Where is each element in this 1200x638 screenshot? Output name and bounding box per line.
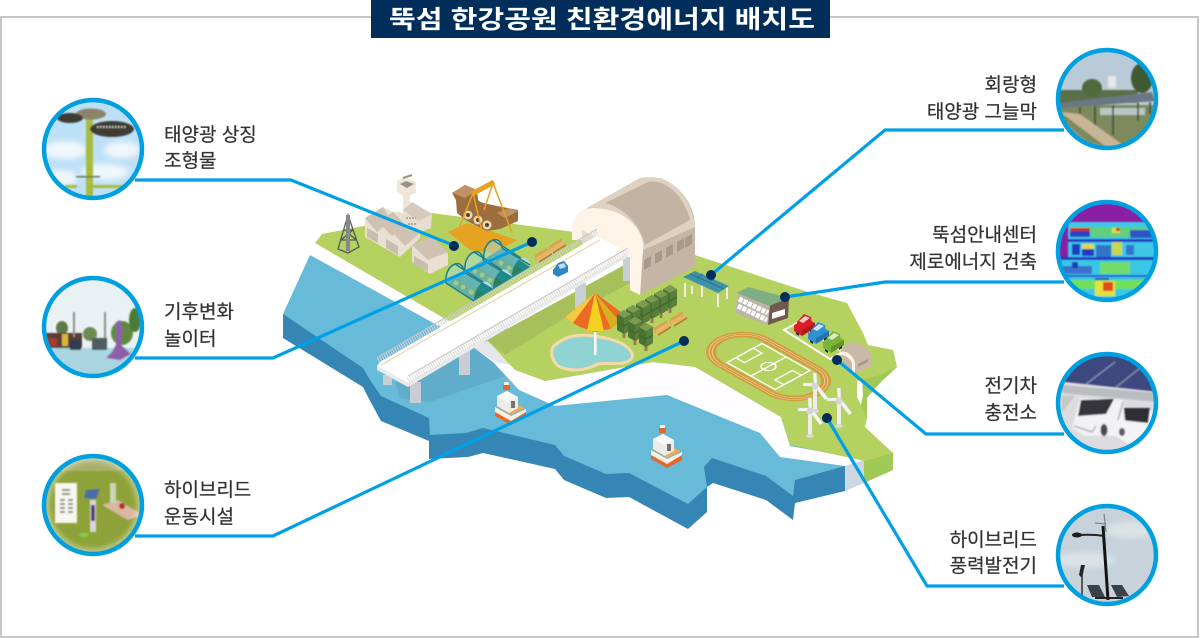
south bank white shore bbox=[473, 340, 866, 466]
leader line: charging station bbox=[837, 360, 1064, 434]
pylon bbox=[338, 215, 359, 253]
running track and field bbox=[691, 323, 846, 410]
photo: playground bbox=[40, 275, 146, 379]
label: EV charging station: 전기차 bbox=[985, 375, 1037, 397]
title: 뚝섬 한강공원 친환경에너지 배치도 bbox=[389, 6, 815, 34]
label: corridor solar canopy: 태양광 그늘막 bbox=[927, 101, 1037, 123]
photo: corridor solar canopy bbox=[1055, 48, 1160, 152]
leader line: solar sculpture bbox=[135, 180, 454, 246]
leader line: sports facility bbox=[135, 341, 684, 536]
pond bbox=[552, 335, 633, 370]
photo: hybrid wind generator bbox=[1055, 504, 1159, 608]
solar canopy bbox=[683, 271, 729, 307]
small shelter bbox=[840, 342, 872, 373]
marker dots bbox=[449, 237, 842, 423]
label: solar sculpture: 조형물 bbox=[164, 150, 216, 172]
swing ride bbox=[448, 182, 518, 253]
isometric island map bbox=[283, 175, 897, 529]
bridge deck bbox=[377, 229, 628, 387]
umbrella bbox=[565, 293, 625, 355]
label: corridor solar canopy: 회랑형 bbox=[985, 74, 1037, 96]
bridge ground shadow bbox=[487, 262, 630, 355]
title bbox=[371, 0, 830, 38]
east cliff face bbox=[845, 460, 864, 491]
label: playground: 놀이터 bbox=[164, 328, 216, 350]
photo: EV charging station bbox=[1055, 352, 1159, 456]
label: playground: 기후변화 bbox=[164, 301, 234, 323]
label: hybrid wind generator: 풍력발전기 bbox=[950, 555, 1037, 577]
leader line: wind generator bbox=[827, 418, 1064, 586]
south green land bbox=[487, 255, 897, 461]
boats bbox=[495, 382, 682, 468]
bridge piers bbox=[383, 257, 630, 403]
cars bbox=[794, 314, 844, 353]
factories bbox=[365, 207, 448, 274]
photo: hybrid sports facility bbox=[40, 453, 146, 557]
label: EV charging station: 충전소 bbox=[985, 402, 1037, 424]
leader line: playground bbox=[135, 242, 532, 358]
north green land bbox=[315, 213, 620, 325]
label: hybrid sports facility: 운동시설 bbox=[164, 506, 234, 528]
river side face bbox=[283, 314, 845, 529]
leader line: canopy bbox=[711, 130, 1064, 275]
label: zero energy building: 제로에너지 건축 bbox=[909, 251, 1037, 273]
small blue car bbox=[553, 261, 568, 277]
tunnel building bbox=[572, 177, 695, 295]
label: zero energy building: 뚝섬안내센터 bbox=[932, 224, 1037, 246]
factory small bbox=[412, 237, 448, 274]
benches south bbox=[654, 311, 687, 336]
leader line: info centre bbox=[785, 282, 1064, 297]
benches north bbox=[535, 238, 566, 263]
river water surface bbox=[283, 255, 845, 504]
north bank white strip bbox=[310, 243, 520, 345]
label: hybrid wind generator: 하이브리드 bbox=[950, 529, 1037, 551]
photo: thermal image bbox=[1055, 200, 1159, 304]
label: hybrid sports facility: 하이브리드 bbox=[164, 479, 251, 501]
parking lot bbox=[784, 323, 843, 359]
info centre building bbox=[735, 287, 789, 325]
bridge shadow on water bbox=[395, 347, 505, 402]
control tower bbox=[397, 175, 432, 233]
tree blocks bbox=[617, 285, 677, 351]
wind turbines bbox=[798, 373, 852, 438]
greenhouses bbox=[446, 240, 530, 301]
photo: solar sculpture bbox=[40, 95, 146, 203]
label: solar sculpture: 태양광 상징 bbox=[164, 124, 257, 146]
east land side bbox=[864, 452, 893, 483]
